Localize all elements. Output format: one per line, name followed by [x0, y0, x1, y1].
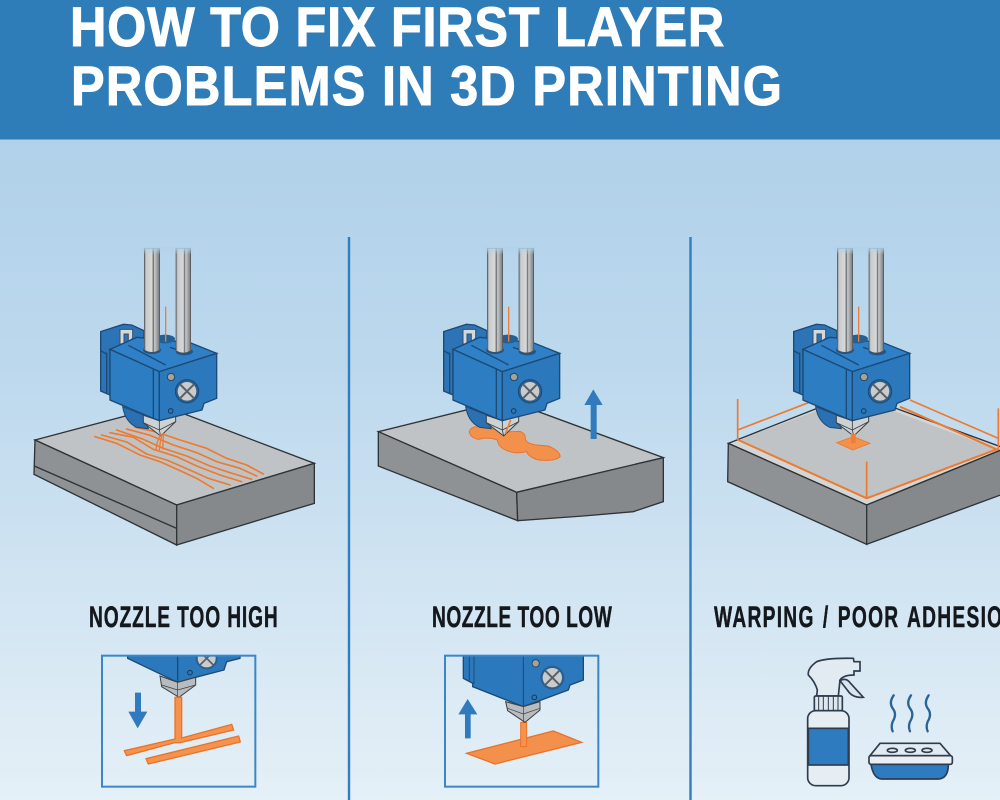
panel: warping / poor adhesion: [714, 247, 1000, 786]
inset: fix for low nozzle: [445, 653, 598, 787]
illustration: print bed with stringy filament and print head: [34, 247, 314, 545]
illustration: print bed with brim outline and print head: [728, 247, 1000, 544]
inset: raise/lower fix for high nozzle: [102, 648, 255, 787]
arrow: raise nozzle: [584, 389, 603, 439]
header banner: [0, 0, 1000, 140]
heading: nozzle too high: NOZZLE TOO HIGH: [89, 601, 278, 634]
heading: nozzle too low: NOZZLE TOO LOW: [432, 601, 612, 634]
panel: nozzle too high: [34, 247, 314, 787]
icon: heated bed dish with steam: [869, 695, 952, 779]
title: [70, 0, 782, 118]
icon: adhesive spray bottle: [808, 658, 863, 786]
title: PROBLEMS IN 3D PRINTING: [71, 56, 782, 118]
panel: nozzle too low: [378, 247, 663, 787]
column dividers: [349, 237, 690, 800]
illustration: print bed with squished filament blob, print head and up arrow: [378, 247, 663, 521]
